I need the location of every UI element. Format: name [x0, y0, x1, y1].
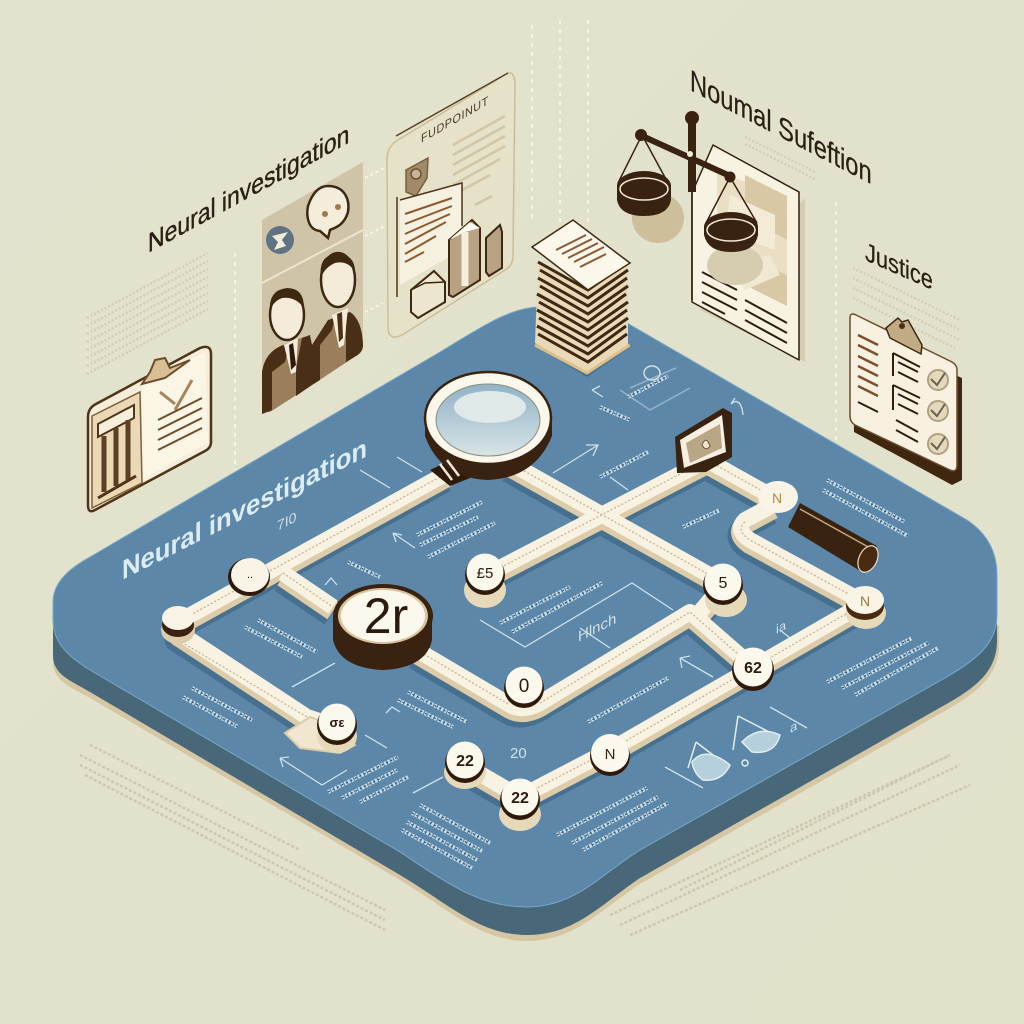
step: node σε: σε [329, 715, 345, 730]
step: node 22 [499, 778, 541, 831]
panel: checklist clipboard [850, 314, 962, 485]
left pan [617, 186, 671, 216]
badge icon [406, 158, 428, 196]
step: left cap [161, 606, 195, 644]
small labels on platform: 7I0 [277, 510, 296, 535]
icon: tick [160, 380, 192, 410]
icon: scales of justice [617, 111, 763, 300]
route side [178, 464, 865, 801]
text card [397, 183, 462, 297]
arrow base under last node [285, 717, 355, 753]
icon: clip [142, 358, 190, 384]
heading: Justice: Justice [865, 237, 933, 296]
icon: gate marker [675, 408, 732, 473]
step: node lower [590, 734, 630, 776]
stack of papers [532, 220, 632, 377]
step: large node 2r: 2r [364, 588, 408, 644]
text blocks on platform [183, 376, 938, 868]
step: node £5 [464, 554, 506, 608]
step: node top: N [772, 490, 782, 506]
clip [886, 318, 922, 354]
platform top [53, 307, 997, 907]
route stitching [178, 460, 865, 797]
heading: Noumal Sufeftion: Noumal Sufeftion [690, 64, 872, 192]
icon: left person [262, 288, 312, 414]
step: node σε [317, 704, 357, 753]
step: node 0: 0 [519, 676, 529, 697]
step: node £5: £5 [477, 565, 493, 582]
small labels on platform [277, 510, 798, 762]
white vertical guide dashes [235, 20, 836, 470]
step: node 5: 5 [719, 575, 728, 592]
icon: magnifying glass [425, 372, 552, 486]
heading: Neural investigation (wall): Neural investigation [148, 118, 349, 259]
floor dotted lines [80, 745, 970, 935]
platform [53, 220, 999, 941]
text block: dotted wall text right [745, 137, 960, 348]
step: node top [758, 481, 798, 513]
icon: dark cylinder handle [788, 503, 882, 575]
bar chart [411, 220, 502, 318]
step: node lower: N [605, 746, 615, 763]
small scales icon [688, 716, 780, 780]
thin annotation lines and arrows [280, 386, 807, 793]
icon: blue avatar [266, 226, 294, 254]
step: node 0 [504, 666, 544, 708]
icon: speech bubble [307, 186, 348, 238]
text block: dotted wall text left [87, 253, 208, 374]
connector dashes [365, 168, 385, 312]
step: node dot: .. [247, 569, 253, 581]
step: node dot [228, 558, 270, 596]
icon: right person [312, 253, 363, 385]
check icons [928, 370, 948, 454]
step: node right [846, 586, 886, 629]
panel: courthouse clipboard [88, 347, 211, 511]
document text lines [702, 272, 787, 343]
top sheet [532, 220, 630, 290]
small labels on platform: 20 [510, 745, 527, 762]
route shadow [176, 468, 863, 805]
step: node 62 [732, 648, 774, 691]
document image blocks [717, 172, 787, 306]
platform title: Neural investigation [122, 432, 367, 586]
step: node 22: 22 [511, 790, 529, 807]
step: node 22 left [444, 742, 486, 789]
step: node right: N [860, 593, 870, 609]
report title: FUDPOINUT [421, 93, 489, 146]
panel: report with chart [387, 73, 515, 337]
route top [178, 460, 865, 797]
right pan [704, 226, 758, 252]
small labels on platform: Hlnch [578, 611, 616, 646]
panel: two people with speech bubble [262, 162, 363, 414]
panel: legal document [692, 145, 805, 362]
platform shadow edge [53, 625, 999, 941]
step: node 5 [703, 564, 747, 617]
step: large node 2r [333, 584, 433, 670]
icon: document scan marker [620, 366, 690, 410]
small labels on platform: ia [776, 617, 786, 637]
step: node 62: 62 [744, 660, 762, 677]
platform side [53, 600, 997, 935]
step: node 22 left: 22 [456, 753, 474, 770]
small labels on platform: a [790, 718, 798, 736]
